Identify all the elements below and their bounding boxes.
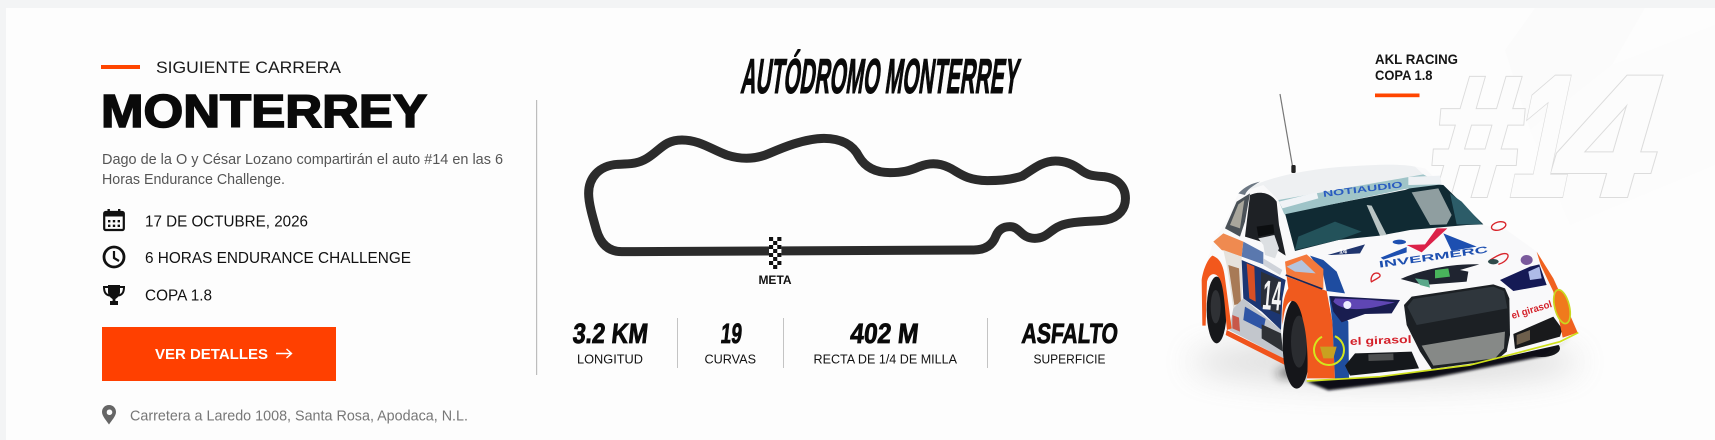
- stat: curvas: CURVAS: [704, 352, 756, 366]
- icon: trophy: [104, 285, 124, 305]
- panel: circuit: [571, 48, 1125, 368]
- door sill: [1226, 330, 1285, 365]
- lime splitter: [1307, 333, 1578, 381]
- panel: circuit: AUTÓDROMO MONTERREY: [738, 48, 1023, 104]
- sponsor: hood blue chevron: [1381, 228, 1477, 260]
- stat: curvas: [704, 318, 756, 366]
- grille lower plate: [1422, 332, 1505, 366]
- blue panel under headlight: [1329, 296, 1349, 378]
- antenna: [1280, 94, 1294, 172]
- grille: [1404, 284, 1510, 369]
- lower left intake: [1345, 352, 1419, 376]
- far front tyre: [1523, 340, 1560, 357]
- address: Carretera a Laredo 1008, Santa Rosa, Apodaca, N.L.: [130, 408, 468, 424]
- illustration: race car: [1202, 165, 1578, 390]
- upper side stripe: [1213, 233, 1282, 275]
- rear fender: [1202, 256, 1232, 330]
- rear side window: [1225, 193, 1250, 237]
- stat: longitud: LONGITUD: [577, 352, 643, 366]
- car shadow: [1190, 324, 1580, 384]
- hood graphic: [1401, 264, 1479, 288]
- door number: 14: [1261, 271, 1284, 320]
- stat: longitud: [571, 318, 650, 366]
- car number outline: [1423, 40, 1668, 232]
- track map: [589, 138, 1125, 252]
- roof rear edge: [1238, 182, 1260, 195]
- stat: superficie: [1020, 318, 1120, 366]
- car number outline: 1: [1507, 40, 1584, 232]
- mirror: [1258, 235, 1279, 258]
- car number outline: #: [1423, 40, 1530, 232]
- hood blue stripe: [1310, 256, 1345, 293]
- right hood dot: [1488, 259, 1499, 264]
- windshield banner: [1278, 174, 1442, 214]
- description: Horas Endurance Challenge.: [102, 172, 285, 188]
- vertical divider: [536, 100, 537, 375]
- body shell: [1202, 165, 1578, 382]
- event name: 6 HORAS ENDURANCE CHALLENGE: [145, 250, 411, 267]
- stat: recta: 402 M: [849, 318, 920, 349]
- front fender: [1282, 277, 1335, 378]
- sponsor: el girasol: el girasol: [1350, 334, 1412, 348]
- finish label: META: [758, 273, 792, 287]
- hood number badge: [1328, 244, 1365, 255]
- car number outline: 4: [1548, 40, 1668, 232]
- series: COPA 1.8: [145, 288, 212, 304]
- button: ver detalles: [102, 327, 336, 381]
- team accent bar: [1375, 94, 1420, 97]
- rear tyre: [1207, 277, 1227, 343]
- lower door: [1229, 298, 1283, 358]
- stat: superficie: SUPERFICIE: [1034, 352, 1106, 366]
- fender logo ring: [1314, 335, 1344, 365]
- car number outline: 4: [1548, 40, 1668, 232]
- icon: calendar: [104, 209, 124, 230]
- sponsor: banner text: NOTIAUDIO: [1322, 179, 1403, 199]
- door window: [1245, 193, 1286, 256]
- icon: location pin: [102, 405, 116, 424]
- fender line: [1286, 275, 1322, 289]
- right headlight: [1500, 264, 1547, 291]
- stat: curvas: 19: [719, 318, 744, 349]
- panel: race information: [101, 58, 503, 424]
- team label: COPA 1.8: [1375, 67, 1433, 83]
- panel: team and car: [1190, 40, 1668, 390]
- rear door graphic: [1223, 250, 1242, 308]
- team label: AKL RACING: [1375, 51, 1458, 67]
- door blue panel: [1242, 260, 1286, 330]
- stat: recta: [814, 318, 957, 366]
- sponsor: el girasol right: el girasol: [1510, 299, 1554, 322]
- front tyre: [1283, 298, 1311, 389]
- right fender logo: [1551, 288, 1573, 325]
- checkered finish flag: [769, 237, 781, 269]
- description: [102, 152, 503, 188]
- accent dash: [101, 65, 140, 69]
- antenna base: [1291, 165, 1296, 173]
- stat: recta: RECTA DE 1/4 DE MILLA: [814, 352, 957, 366]
- stat: longitud: 3.2 KM: [571, 318, 650, 349]
- race title: MONTERREY: [101, 85, 427, 137]
- upper grille mesh: [1407, 287, 1507, 325]
- eyebrow heading: SIGUIENTE CARRERA: [156, 58, 342, 77]
- date: 17 DE OCTUBRE, 2026: [145, 214, 308, 230]
- description: Dago de la O y César Lozano compartirán el auto #14 en las 6: [102, 152, 503, 168]
- stat: superficie: ASFALTO: [1020, 318, 1120, 349]
- rear rim: [1211, 290, 1221, 323]
- windshield: [1285, 183, 1483, 251]
- team label: [1375, 51, 1458, 83]
- front end details: [1307, 220, 1578, 381]
- icon: clock: [104, 247, 124, 267]
- car number outline: #: [1423, 40, 1530, 232]
- red tow loops: [1371, 220, 1508, 282]
- left headlight: [1330, 296, 1400, 322]
- right fender: [1537, 252, 1578, 338]
- fender top sticker: [1285, 254, 1323, 289]
- roof shading: [1238, 165, 1423, 200]
- right intake: [1513, 317, 1562, 349]
- sponsor: invermerc: INVERMERC: [1378, 244, 1489, 270]
- button: ver detalles: VER DETALLES: [155, 346, 268, 363]
- hood number badge: 14: [1339, 246, 1348, 255]
- car number outline: 1: [1507, 40, 1584, 232]
- underbody: [1307, 345, 1558, 390]
